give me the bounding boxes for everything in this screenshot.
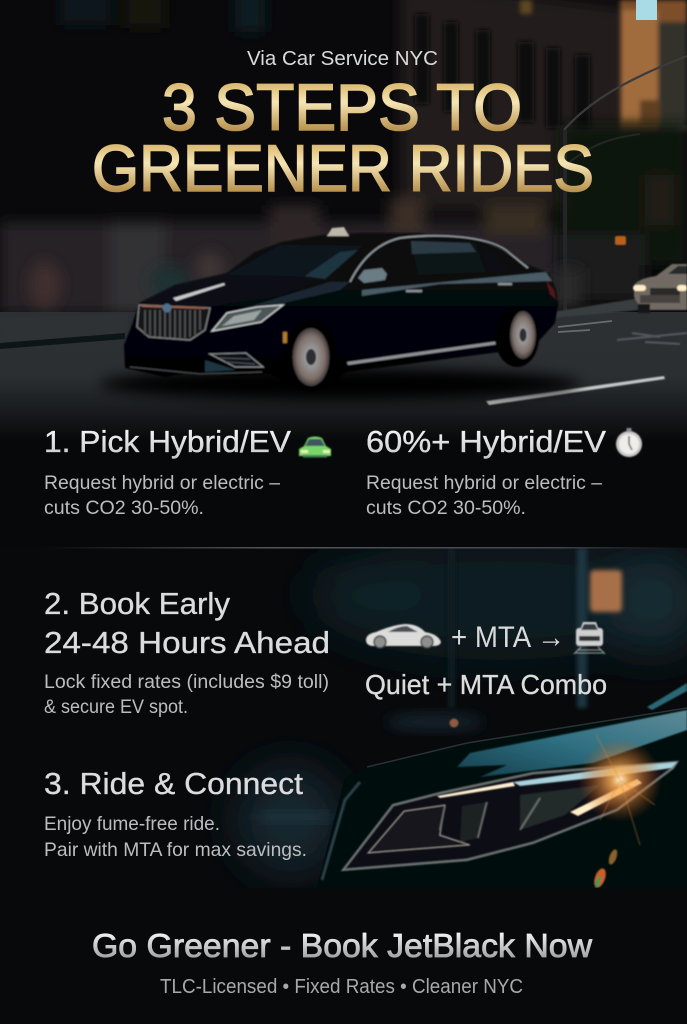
step 2 heading: 24-48 Hours Ahead — [44, 625, 330, 660]
panel: step 1 pick hybrid/EV — [44, 424, 331, 519]
step 3 heading: 3. Ride & Connect — [44, 766, 303, 801]
car hood with glowing headlight — [317, 708, 687, 889]
icon: clock — [616, 428, 642, 457]
rear wheel — [495, 307, 539, 367]
step 2 heading — [44, 586, 330, 660]
hood crease highlight — [367, 708, 687, 767]
step 2 body: & secure EV spot. — [44, 696, 188, 718]
footer background — [0, 888, 687, 1024]
hero photo: city street background — [0, 0, 687, 320]
windshield — [227, 245, 362, 279]
step 2 heading: 2. Book Early — [44, 586, 230, 621]
headlight lens elements — [368, 785, 600, 853]
stat body — [366, 472, 602, 519]
trust line: TLC-Licensed • Fixed Rates • Cleaner NYC — [160, 976, 523, 998]
car shadow — [100, 368, 580, 400]
step 2 body: Lock fixed rates (includes $9 toll) — [44, 671, 329, 693]
road and sidewalk — [0, 298, 687, 440]
road lane marking — [486, 376, 665, 405]
grille — [137, 304, 210, 340]
icon: vehicle on rail track — [574, 622, 605, 654]
window chrome trim — [350, 236, 528, 282]
step 1 heading: 1. Pick Hybrid/EV — [44, 424, 291, 459]
hood highlight — [173, 283, 225, 301]
CTA headline: Go Greener - Book JetBlack Now — [92, 927, 592, 964]
flare rays — [596, 735, 655, 845]
rainbow lens artefacts — [592, 848, 619, 889]
panel: step 3 ride and connect — [44, 766, 307, 861]
equation: plus MTA arrow: + MTA → — [451, 621, 565, 654]
step 1 body: cuts CO2 30-50%. — [44, 497, 204, 519]
title — [92, 70, 594, 205]
step 3 body — [44, 813, 307, 861]
distant car — [633, 264, 687, 313]
hood sheen — [140, 274, 320, 306]
step 3 body: Pair with MTA for max savings. — [44, 839, 307, 861]
beltline reflection — [362, 272, 552, 296]
panel: quiet + MTA combo — [365, 621, 607, 700]
side windows — [362, 241, 527, 277]
header block — [92, 47, 594, 205]
light streaks — [437, 762, 677, 816]
lens flare — [578, 738, 662, 822]
combo label: Quiet + MTA Combo — [365, 669, 607, 700]
hood body — [317, 708, 687, 888]
taillight — [546, 280, 556, 300]
stat heading: 60%+ Hybrid/EV — [366, 424, 606, 459]
hood reflection — [457, 710, 687, 777]
title: 3 STEPS TO — [162, 70, 522, 144]
panel: step 2 book early — [44, 586, 330, 718]
call to action — [92, 927, 592, 998]
panel: 60%+ hybrid/EV stat — [366, 424, 642, 519]
car body — [124, 233, 558, 386]
chrome sill — [347, 341, 499, 365]
fender edge — [322, 782, 360, 880]
title: GREENER RIDES — [92, 131, 594, 205]
fog vent — [210, 353, 263, 367]
door handles — [406, 284, 512, 291]
headlight housing — [343, 762, 677, 870]
step 1 body: Request hybrid or electric – — [44, 472, 280, 494]
section divider — [40, 547, 687, 548]
lower photo: night street with headlight — [220, 548, 687, 888]
taxi roof light — [327, 227, 349, 236]
step 1 body — [44, 472, 280, 519]
mirror — [358, 268, 387, 283]
icon: white sedan — [366, 624, 441, 648]
eyebrow: Via Car Service NYC — [247, 47, 438, 70]
icon: green car — [299, 436, 331, 458]
stat body: cuts CO2 30-50%. — [366, 497, 526, 519]
headlight — [212, 305, 283, 331]
main car: black hybrid sedan — [124, 227, 558, 392]
step 2 body — [44, 671, 329, 718]
stat body: Request hybrid or electric – — [366, 472, 602, 494]
amber marker — [283, 332, 287, 343]
front wheel — [285, 320, 337, 392]
step 3 body: Enjoy fume-free ride. — [44, 813, 220, 835]
